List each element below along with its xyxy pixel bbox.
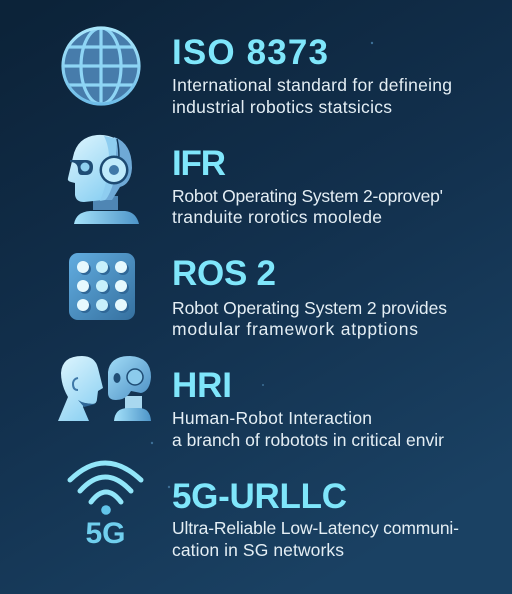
text: ROS 2 description: modular framework atpptions — [172, 319, 418, 339]
text: HRI description — [172, 408, 444, 450]
text: IFR description: tranduite rorotics moolede — [172, 207, 382, 227]
text: ISO 8373 description — [172, 75, 452, 117]
text: IFR description: Robot Operating System 2-oprovep' — [172, 186, 443, 206]
text: IFR description — [172, 186, 443, 227]
icon: module grid — [69, 253, 135, 320]
text: 5G-URLLC description — [172, 518, 459, 560]
heading: 5G-URLLC: 5G-URLLC — [172, 477, 347, 516]
icon: robot head profile — [68, 135, 139, 224]
icon: globe — [60, 26, 142, 106]
text: ROS 2 description — [172, 298, 447, 339]
text: HRI description: a branch of robotots in critical envir — [172, 430, 444, 450]
icon: human and robot facing — [58, 356, 151, 421]
icon: 5G wifi: 5G — [85, 517, 126, 550]
text: ROS 2 description: Robot Operating System 2 provides — [172, 298, 447, 318]
text: 5G-URLLC description: cation in SG networks — [172, 540, 344, 560]
heading: ISO 8373: ISO 8373 — [172, 33, 328, 72]
icon: 5G wifi — [70, 463, 141, 550]
text: HRI description: Human-Robot Interaction — [172, 408, 372, 428]
heading: HRI: HRI — [172, 366, 232, 405]
heading: IFR: IFR — [172, 144, 226, 183]
text: ISO 8373 description: industrial robotics statsicics — [172, 97, 392, 117]
text: 5G-URLLC description: Ultra-Reliable Low-Latency communi- — [172, 518, 459, 538]
heading: ROS 2: ROS 2 — [172, 254, 276, 293]
text: ISO 8373 description: International standard for defineing — [172, 75, 452, 95]
